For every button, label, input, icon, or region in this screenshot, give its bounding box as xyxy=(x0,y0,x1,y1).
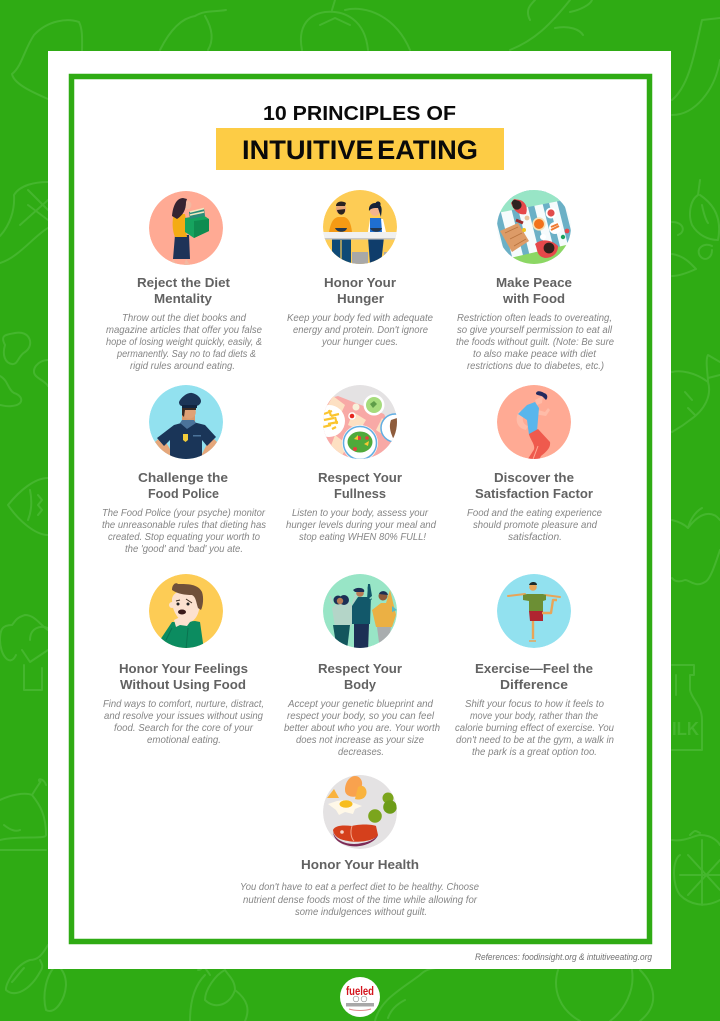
icon: eggs, grapes and steak xyxy=(323,775,397,849)
doodle: corn xyxy=(0,182,48,263)
icon: group of people cheering xyxy=(323,574,397,652)
body text: rigid rules around eating. xyxy=(130,360,235,372)
heading: Challenge the xyxy=(138,470,228,485)
body text: move your body, rather than the xyxy=(470,710,598,722)
body text: Shift your focus to how it feels to xyxy=(465,698,604,710)
title line two: INTUITIVE EATING xyxy=(242,135,478,165)
heading: Exercise—Feel the xyxy=(475,661,593,676)
heading line two: Satisfaction Factor xyxy=(475,486,593,501)
white panel xyxy=(48,51,671,969)
doodle: chili xyxy=(160,10,226,50)
body text xyxy=(106,312,262,372)
panel: reject the diet mentality xyxy=(106,191,262,372)
body text: food. Search for the core of your xyxy=(114,722,253,734)
doodle: radish xyxy=(672,355,720,432)
body text: created. Stop equating your worth to xyxy=(108,531,260,543)
icon: man in yoga pose xyxy=(497,574,571,648)
body text: restrictions due to diabetes, etc.) xyxy=(467,360,604,372)
body text: does not increase as your size xyxy=(296,734,424,746)
body text: satisfaction. xyxy=(508,531,562,543)
heading line two: Food Police xyxy=(148,486,219,501)
doodle: bottom strawberries xyxy=(556,970,653,1021)
body text: You don't have to eat a perfect diet to be healthy. Choose xyxy=(240,881,479,893)
heading line two: Fullness xyxy=(334,486,386,501)
heading line two: Body xyxy=(344,677,377,692)
panel: discover the satisfaction factor xyxy=(467,385,602,543)
body text: stop eating WHEN 80% FULL! xyxy=(299,531,426,543)
body text: Accept your genetic blueprint and xyxy=(287,698,434,710)
doodle: banana xyxy=(672,18,720,115)
doodle: orange xyxy=(672,831,720,905)
heading: Respect Your xyxy=(318,661,402,676)
body text: permanently. Say no to fad diets & xyxy=(116,348,256,360)
body text: and resolve your issues without using xyxy=(104,710,263,722)
title xyxy=(216,103,504,170)
icon: police officer xyxy=(149,385,223,462)
body text: decreases. xyxy=(338,746,384,758)
body text: the foods without guilt. (Note: Be sure xyxy=(456,336,614,348)
icon: table of plated food xyxy=(323,385,397,459)
heading line two: Hunger xyxy=(337,291,384,306)
doodle: beans xyxy=(0,333,48,406)
heading line two: Mentality xyxy=(154,291,213,306)
doodle: apple xyxy=(672,508,720,584)
body text xyxy=(103,698,264,746)
doodle: vitamin c letters and wedge xyxy=(672,222,712,276)
doodle: strawberries xyxy=(301,0,410,50)
panel: honor your feelings xyxy=(103,574,264,746)
icon: dancing man xyxy=(497,385,571,462)
milk label: ILK xyxy=(672,719,699,739)
icon: couple eating at table xyxy=(323,190,397,266)
icon: worried man xyxy=(149,574,223,650)
doodle: broccoli xyxy=(0,615,48,690)
body text: respect your body, so you can feel xyxy=(287,710,435,722)
heading: Discover the xyxy=(494,470,574,485)
body text: calorie burning effect of exercise. You xyxy=(455,722,614,734)
doodle: roast chicken xyxy=(0,779,46,850)
references: References: foodinsight.org & intuitiveeating.org xyxy=(475,952,652,962)
body text: emotional eating. xyxy=(147,734,221,746)
logo wordmark: fueled xyxy=(346,986,374,998)
green inner frame xyxy=(72,76,650,942)
body text xyxy=(286,507,437,543)
body text xyxy=(456,312,614,372)
body text: hunger levels during your meal and xyxy=(286,519,437,531)
doodle: milk bottle xyxy=(672,665,702,750)
heading: Reject the Diet xyxy=(137,275,231,290)
heading: Honor Your xyxy=(324,275,396,290)
panel: honor your health xyxy=(240,775,479,918)
panel: exercise feel the difference xyxy=(455,574,614,758)
body text: hope of losing weight quickly, easily, & xyxy=(106,336,262,348)
panel: respect your fullness xyxy=(286,385,437,543)
body text: the park is a great option too. xyxy=(472,746,597,758)
body text xyxy=(455,698,614,758)
body text: don't need to be at the gym, a walk in xyxy=(456,734,614,746)
icon: woman carrying box of diet books xyxy=(149,191,223,265)
body text: your hunger cues. xyxy=(321,336,398,348)
body text: Food and the eating experience xyxy=(467,507,602,519)
panel: respect your body xyxy=(284,574,440,758)
body text xyxy=(287,312,433,348)
body text xyxy=(102,507,267,555)
doodle: wheat xyxy=(510,0,592,50)
doodle: grapes xyxy=(190,967,248,1021)
body text: Keep your body fed with adequate xyxy=(287,312,433,324)
body text xyxy=(240,881,479,918)
panel: challenge the food police xyxy=(102,385,267,555)
body text: the unreasonable rules that dieting has xyxy=(102,519,267,531)
doodle: fish xyxy=(8,478,48,535)
heading line two: with Food xyxy=(502,291,565,306)
body text: so give yourself permission to eat all xyxy=(457,324,613,336)
body text: the 'good' and 'bad' you ate. xyxy=(125,543,243,555)
body text: should promote pleasure and xyxy=(473,519,598,531)
doodle: lemon xyxy=(12,20,82,99)
heading line two: Without Using Food xyxy=(120,677,246,692)
body text: The Food Police (your psyche) monitor xyxy=(102,507,265,519)
doodle: eggplant xyxy=(375,965,445,1021)
body text xyxy=(467,507,602,543)
body text: magazine articles that offer you false xyxy=(106,324,262,336)
body text: Throw out the diet books and xyxy=(122,312,247,324)
body text: Restriction often leads to overeating, xyxy=(457,312,612,324)
doodle: leaf xyxy=(690,180,719,240)
body text: Listen to your body, assess your xyxy=(292,507,428,519)
doodle: olives xyxy=(6,945,66,1011)
body text: some indulgences without guilt. xyxy=(295,906,427,918)
logo xyxy=(340,977,380,1017)
heading: Respect Your xyxy=(318,470,402,485)
title line one: 10 PRINCIPLES OF xyxy=(263,103,456,125)
heading: Honor Your Feelings xyxy=(119,661,248,676)
panel: make peace with food xyxy=(456,184,614,372)
body text: energy and protein. Don't ignore xyxy=(293,324,428,336)
body text xyxy=(284,698,440,758)
body text: Find ways to comfort, nurture, distract, xyxy=(103,698,264,710)
body text: better about who you are. Your worth xyxy=(284,722,440,734)
icon: picnic blanket from above xyxy=(497,190,571,264)
panel: honor your hunger xyxy=(287,190,433,348)
heading: Honor Your Health xyxy=(301,857,419,872)
heading line two: Difference xyxy=(500,677,568,692)
body text: nutrient dense foods most of the time while allowing for xyxy=(243,894,477,906)
heading: Make Peace xyxy=(496,275,572,290)
body text: to also make peace with diet xyxy=(473,348,597,360)
title highlight box xyxy=(216,128,504,170)
